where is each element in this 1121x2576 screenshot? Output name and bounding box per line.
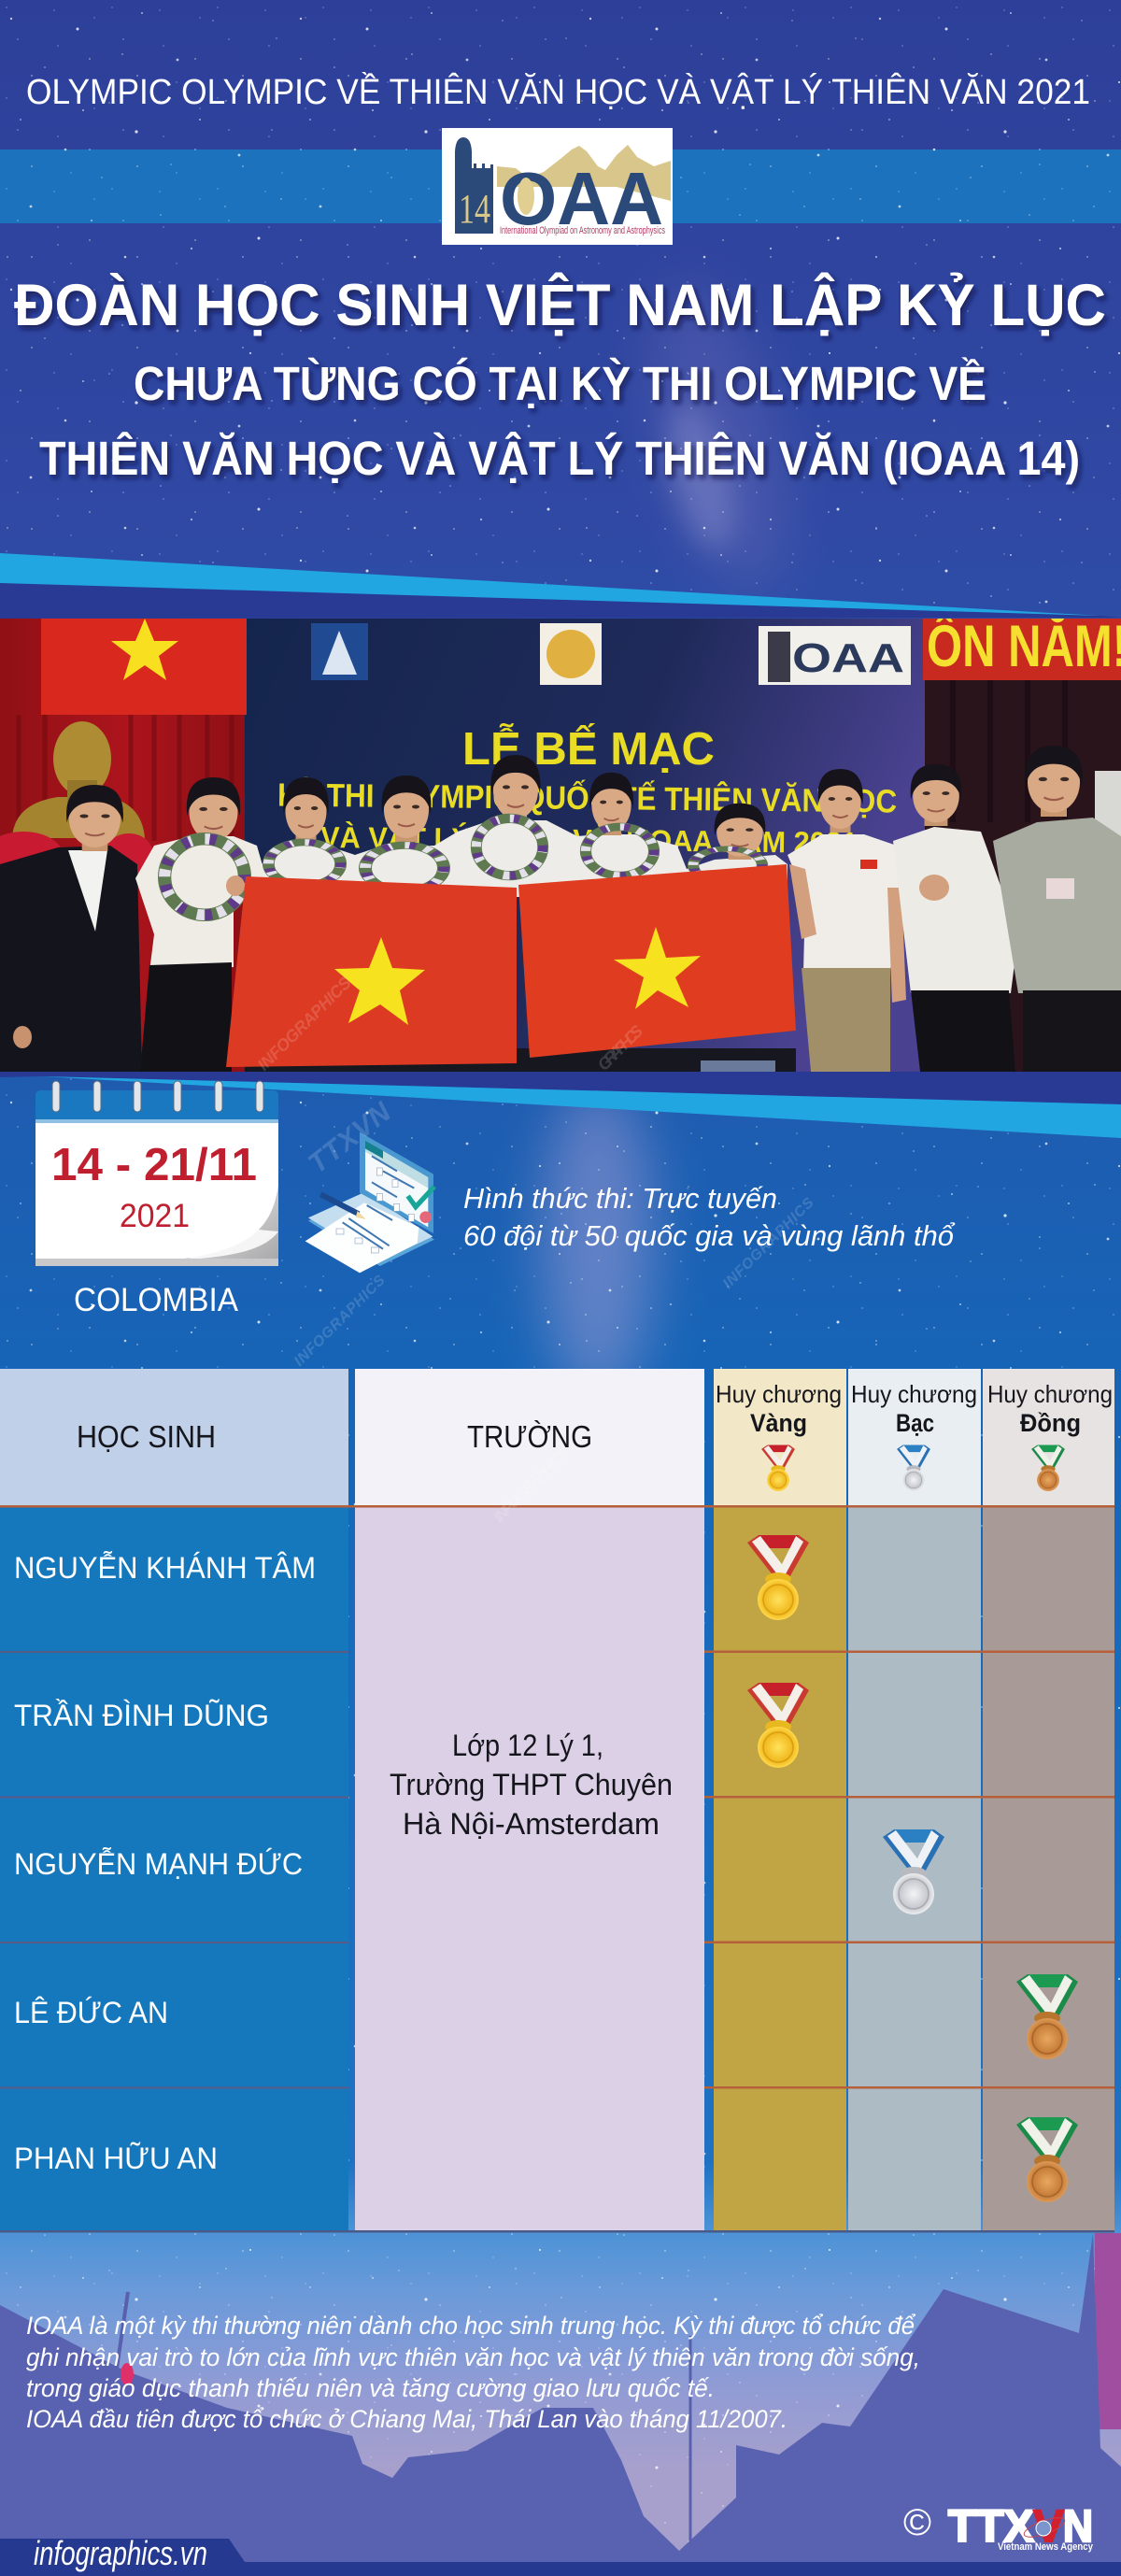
table header: gold: Huy chương xyxy=(716,1380,842,1408)
lower diagonal ribbon xyxy=(0,1072,1121,1138)
table header: gold xyxy=(714,1369,846,1506)
table header: silver: Bạc xyxy=(896,1409,934,1437)
medal: Nguyễn Khánh Tâm gold xyxy=(747,1535,809,1620)
location: COLOMBIA xyxy=(74,1282,239,1318)
exam format text xyxy=(463,1182,956,1252)
IOAA logo: OAA xyxy=(500,157,663,240)
photo: person 2 white shirt xyxy=(135,777,266,1072)
TTXVN logo: TTX xyxy=(948,2502,1034,2552)
table header: school: TRƯỜNG xyxy=(467,1419,592,1454)
medal: Trần Đình Dũng gold xyxy=(747,1683,809,1768)
IOAA logo: 14 xyxy=(459,186,490,232)
table header: bronze: Huy chương xyxy=(987,1380,1113,1408)
medal: Lê Đức An bronze xyxy=(1016,1974,1078,2059)
medal: Nguyễn Mạnh Đức silver xyxy=(883,1829,944,1914)
medal: Phan Hữu An bronze xyxy=(1016,2117,1078,2202)
calendar icon xyxy=(35,1081,278,1266)
photo: backdrop logos xyxy=(311,623,911,685)
watermarks: INFOGRAPHICS xyxy=(254,974,355,1075)
student names: TRẦN ĐÌNH DŨNG xyxy=(14,1699,269,1732)
photo: bronze bust xyxy=(12,721,145,838)
footer paragraph: IOAA đầu tiên được tổ chức ở Chiang Mai, Thái Lan vào tháng 11/2007. xyxy=(26,2405,788,2433)
table header: students: HỌC SINH xyxy=(77,1419,216,1454)
table header: school xyxy=(355,1369,704,1506)
photo: student torsos behind flags xyxy=(245,820,796,1072)
student names xyxy=(14,1551,316,2175)
school name: Lớp 12 Lý 1, xyxy=(452,1729,603,1762)
school name xyxy=(390,1729,673,1841)
photo: person 9 white shirt xyxy=(893,764,1018,1072)
table header: silver xyxy=(848,1369,981,1506)
photo: person 10 grey jacket xyxy=(993,746,1121,1072)
TTXVN logo: N xyxy=(1063,2502,1093,2552)
table header: bronze xyxy=(983,1369,1114,1506)
exam format text: 60 đội từ 50 quốc gia và vùng lãnh thổ xyxy=(463,1219,956,1252)
top diagonal ribbon xyxy=(0,553,1121,619)
photo: left red curtain and flag xyxy=(0,619,247,1072)
watermarks: TTXVN xyxy=(303,1096,398,1180)
photo: flowers xyxy=(0,832,152,873)
student names: PHAN HỮU AN xyxy=(14,2142,218,2175)
watermarks: INFOGRAPHICS xyxy=(291,1273,389,1370)
group photo xyxy=(0,613,1121,1072)
table header: silver: Huy chương xyxy=(851,1380,977,1408)
main heading: CHƯA TỪNG CÓ TẠI KỲ THI OLYMPIC VỀ xyxy=(134,356,986,410)
TTXVN logo: V xyxy=(1033,2502,1064,2552)
calendar date: 14 - 21/11 xyxy=(51,1140,257,1190)
photo: backdrop text: VÀ VẬT LÝ THIÊN VĂN IOAA NĂM 2021 xyxy=(320,820,858,860)
school name: Trường THPT Chuyên xyxy=(390,1768,673,1801)
photo: backdrop text: KỲ THI OLYMPIC QUỐC TẾ THIÊN VĂN HỌC xyxy=(277,776,897,819)
icon: online exam laptop xyxy=(305,1132,434,1273)
photo: backdrop text xyxy=(277,724,897,860)
IOAA logo xyxy=(442,128,673,245)
table header: bronze: Đồng xyxy=(1020,1409,1081,1437)
photo: person 8 polo xyxy=(788,769,906,1072)
results table xyxy=(0,1369,1114,2233)
footer paragraph: ghi nhận vai trò to lớn của lĩnh vực thiên văn học và vật lý thiên văn trong đời sống, xyxy=(26,2343,920,2371)
photo: right dark curtain and banner xyxy=(923,613,1121,1072)
IOAA logo: International Olympiad on Astronomy and Astrophysics xyxy=(500,225,665,236)
student names: NGUYỄN KHÁNH TÂM xyxy=(14,1551,316,1585)
footer paragraph xyxy=(26,2312,920,2433)
table header: gold: Vàng xyxy=(750,1409,807,1437)
photo: stage backdrop xyxy=(245,619,925,1072)
photo: garlands and heads of students xyxy=(268,755,765,890)
footer bar and website tab xyxy=(0,2534,1121,2576)
footer paragraph: IOAA là một kỳ thi thường niên dành cho học sinh trung học. Kỳ thi được tổ chức để xyxy=(26,2312,916,2340)
photo: two Vietnamese flags xyxy=(226,864,796,1067)
table header: students xyxy=(0,1369,348,1506)
footer paragraph: trong giáo dục thanh thiếu niên và tăng cường giao lưu quốc tế. xyxy=(26,2374,715,2402)
student names: NGUYỄN MẠNH ĐỨC xyxy=(14,1847,303,1881)
watermarks xyxy=(254,974,817,1526)
skyline silhouette xyxy=(0,2233,1121,2576)
TTXVN logo: Vietnam News Agency xyxy=(998,2541,1094,2553)
photo: backdrop logos: OAA xyxy=(792,635,904,681)
watermarks: INFOGRAPHICS xyxy=(491,1445,572,1526)
watermarks: GRAPHICS xyxy=(594,1021,646,1075)
main heading xyxy=(14,272,1106,485)
watermarks: INFOGRAPHICS xyxy=(720,1195,817,1292)
photo: backdrop text: LỄ BẾ MẠC xyxy=(462,724,715,775)
calendar year: 2021 xyxy=(120,1198,190,1234)
school name: Hà Nội-Amsterdam xyxy=(403,1807,660,1841)
exam format text: Hình thức thi: Trực tuyến xyxy=(463,1182,777,1215)
photo: person 1 suit xyxy=(0,785,142,1072)
footer bar and website tab: infographics.vn xyxy=(34,2534,207,2572)
student names: LÊ ĐỨC AN xyxy=(14,1996,168,2029)
TTXVN logo: © xyxy=(903,2502,931,2543)
table body columns xyxy=(0,1506,1114,2230)
TTXVN logo xyxy=(903,2502,1094,2553)
